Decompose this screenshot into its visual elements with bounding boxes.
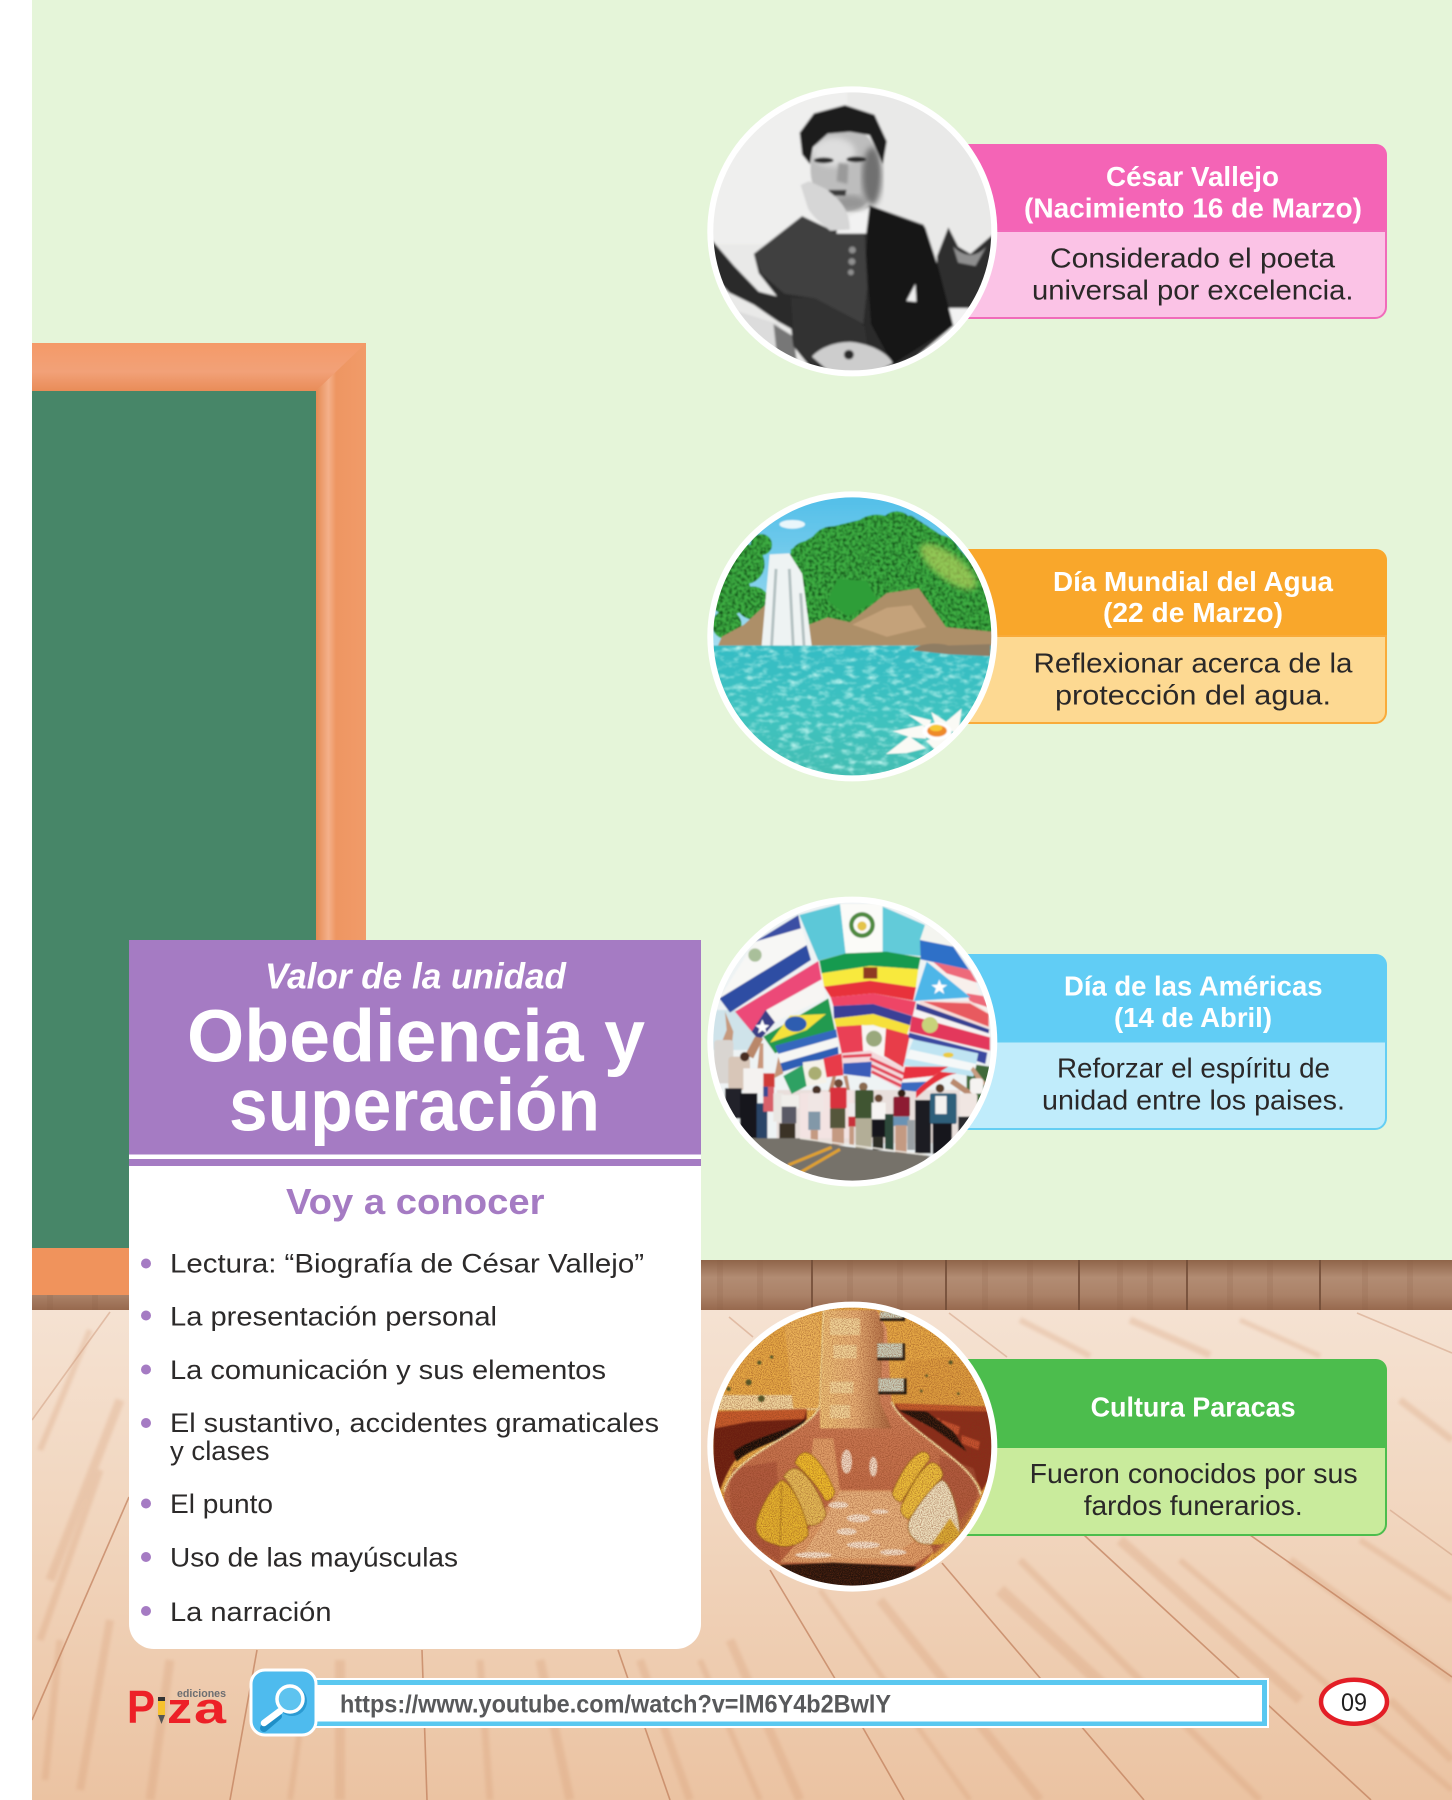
soft plank grain [40,1320,1452,1800]
card: Día de las Américas: unidad entre los paises. [1042,1085,1345,1116]
list heading: Voy a conocer [286,1181,544,1222]
list items: La narración [170,1597,332,1627]
frame bottom bar [32,1248,316,1295]
flag: Costa Rica [908,1003,990,1053]
feature: Día de las Américas [707,897,1387,1187]
flag: Puerto Rico [919,925,926,942]
list items: Lectura: “Biografía de César Vallejo” [170,1248,644,1278]
chamber floor [780,1438,933,1565]
url text: https://www.youtube.com/watch?v=lM6Y4b2BwlY [340,1691,891,1719]
feature: Cultura Paracas [707,1302,1387,1592]
logo: ediciones Piza: ediciones [177,1688,226,1700]
panel: Voy a conocer list [129,1154,701,1649]
bullets [141,1258,151,1616]
list items: y clases [170,1436,270,1466]
card: Día de las Américas: Reforzar el espíritu de [1057,1053,1330,1084]
bottom shadow [780,1563,917,1588]
logo: ediciones Piza: P [127,1681,155,1733]
page number badge: 09 [1341,1689,1367,1717]
card: César Vallejo: César Vallejo [1106,161,1279,192]
list items: El sustantivo, accidentes gramaticales [170,1408,659,1438]
flag: Mexico center [836,1025,863,1053]
logo: ediciones Piza: z [167,1684,192,1733]
frame right bar [316,343,366,1295]
foliage [707,511,1003,639]
card: Cultura Paracas: fardos funerarios. [1084,1490,1303,1521]
wood floor [32,1310,1452,1800]
main title: Obediencia y [187,994,645,1077]
soil specks [727,1355,960,1402]
flag: Bolivia [819,952,921,973]
photo: portrait of César Vallejo [707,86,998,376]
list items [170,1248,659,1627]
flag: Nicaragua [775,1029,837,1054]
card: Día de las Américas: Día de las Américas [1064,971,1322,1002]
list items: El punto [170,1489,273,1519]
flag: USA [842,1051,905,1091]
icon: pencil i [158,1697,165,1724]
card: Cultura Paracas: Fueron conocidos por sus [1030,1458,1358,1489]
url search bar [300,1678,1269,1728]
card: César Vallejo: Considerado el poeta [1050,242,1335,274]
photo: crowd carrying flags of the Americas [707,897,997,1187]
flag: Mexico left [783,1065,807,1094]
card: César Vallejo [950,144,1387,318]
rock cliff [718,587,992,647]
vertical shaft [820,1310,892,1428]
face with soft shading [810,126,882,212]
dark earth strata left [713,1409,807,1490]
flag: Brazil [763,998,835,1053]
chamber outline [724,1402,981,1495]
waterfall [761,553,812,649]
funerary bundles [756,1452,960,1546]
white water lily [886,709,963,754]
wood wainscot [32,1260,1452,1310]
panel: unit value heading [129,940,701,1154]
feature: Día Mundial del Agua [700,487,1387,786]
card: Cultura Paracas: Cultura Paracas [1091,1392,1296,1422]
list items: Uso de las mayúsculas [170,1542,458,1572]
crowd [714,1012,986,1154]
card: Día Mundial del Agua [950,549,1387,723]
card: Día de las Américas: (14 de Abril) [1114,1002,1272,1033]
main title [187,994,645,1147]
card: Día Mundial del Agua: Día Mundial del Agua [1053,566,1333,597]
icon: magnifying glass [251,1670,316,1735]
card: Día de las Américas [950,954,1387,1129]
flag: Chile [735,961,822,1032]
card: Cultura Paracas [950,1359,1387,1535]
card: César Vallejo: (Nacimiento 16 de Marzo) [1024,192,1362,224]
logo: ediciones Piza [127,1681,227,1733]
card: Día Mundial del Agua: protección del agua. [1055,680,1331,711]
card: César Vallejo: universal por excelencia. [1032,274,1354,306]
flag: lower right [903,1067,948,1079]
main title: superación [229,1064,600,1147]
card: Día Mundial del Agua: (22 de Marzo) [1103,597,1283,628]
burial niches [877,1312,907,1394]
green wall background [32,0,1452,1262]
dark earth strata right [895,1403,993,1492]
feature: César Vallejo [700,79,1387,390]
list items: La comunicación y sus elementos [170,1355,606,1385]
card: Día Mundial del Agua: Reflexionar acerca de la [1034,648,1353,679]
frame top bar [32,343,366,391]
logo: ediciones Piza: a [194,1684,227,1733]
banner behind crowd [777,1090,960,1143]
street with yellow lines [750,1138,930,1183]
page number badge [1321,1680,1387,1724]
photo: waterfall and turquoise lagoon [700,487,1005,786]
list items: La presentación personal [170,1302,497,1332]
subtitle: Valor de la unidad [265,956,567,997]
chamber interior [724,1310,982,1572]
flag: Venezuela [831,993,916,1016]
chalkboard with wooden frame [32,343,366,1295]
flag: El Salvador [722,929,805,996]
flag: Guatemala [799,904,846,961]
illustration: Paracas burial chamber [707,1302,997,1592]
flag: Argentina [903,1039,978,1077]
lagoon water [714,644,991,776]
board surface [32,391,316,1248]
